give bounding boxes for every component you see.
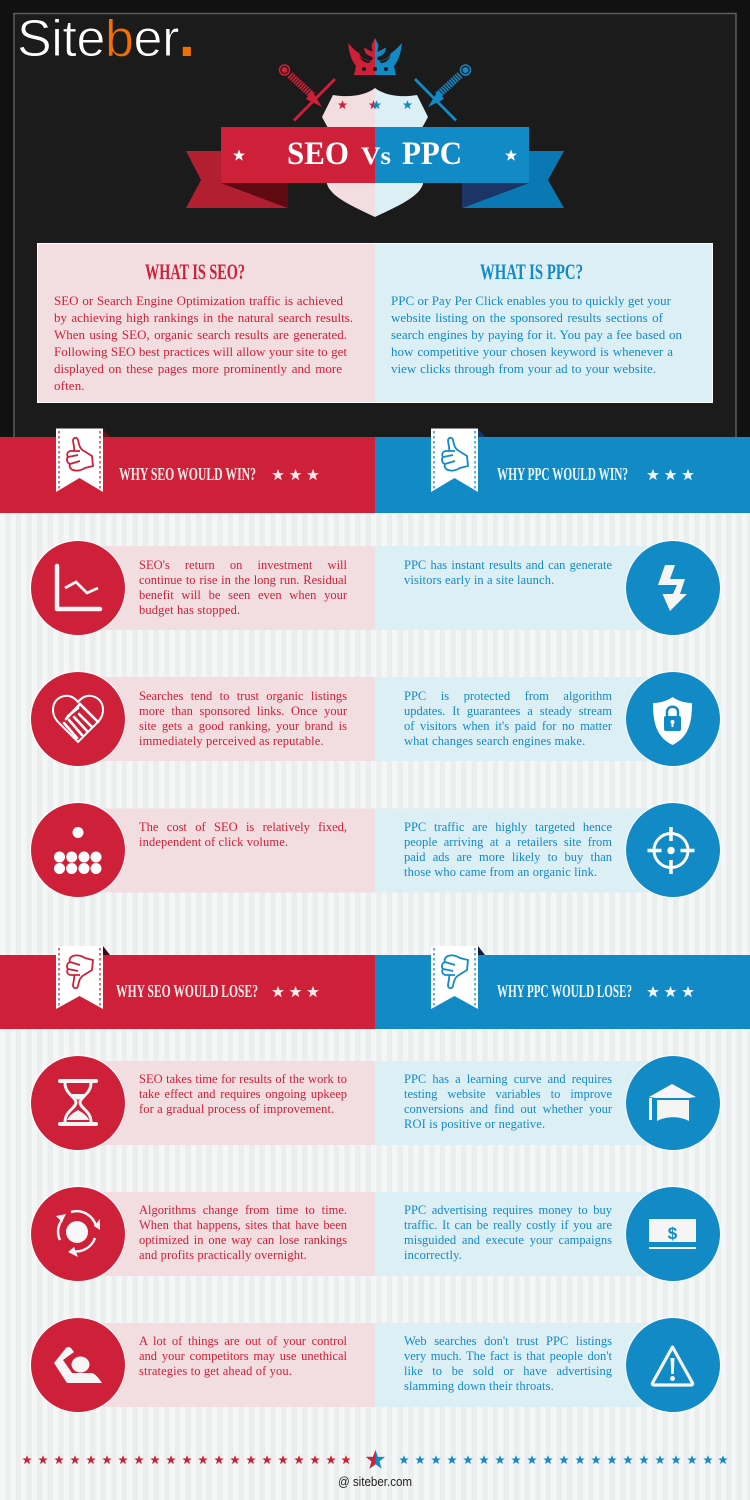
text: SEO lose 2: Algorithms change from time to time. (139, 1203, 347, 1217)
icon: money note (626, 1186, 720, 1282)
heading text: WHY PPC WOULD LOSE? (497, 981, 632, 1001)
text: PPC lose 3: slamming down their throats. (404, 1379, 554, 1393)
text: what is PPC: view clicks through from your ad to your website. (391, 361, 656, 376)
text: what is SEO: by achieving high rankings in the natural search results. (54, 310, 353, 325)
text: PPC win 2 (404, 689, 612, 748)
title: Vs (361, 143, 391, 170)
text: PPC win 2: PPC is protected from algorithm (404, 689, 612, 703)
icon: red sword (280, 65, 335, 120)
text: PPC lose 3 (404, 1334, 612, 1393)
text: SEO lose 3: and your competitors may use unethical (139, 1349, 347, 1363)
text: what is PPC: PPC or Pay Per Click enables you to quickly get your (391, 293, 671, 308)
title (287, 136, 462, 172)
text: SEO lose 1: for a gradual process of improvement. (139, 1102, 334, 1116)
text: PPC lose 3: like to be sold or have advertising (404, 1364, 612, 1378)
text: what is SEO: When using SEO, organic search results are generated. (54, 327, 347, 342)
text: SEO win 2: site gets a good ranking, your brand is (139, 719, 347, 733)
text: SEO win 1: benefit will be seen even when your (139, 588, 347, 602)
dark header background (0, 0, 750, 454)
panel: what is SEO (38, 244, 375, 402)
text: SEO win 2 (139, 689, 347, 748)
banner (186, 127, 564, 208)
text: SEO win 2: Searches tend to trust organic listings (139, 689, 347, 703)
text: PPC win 3: paid ads are more likely to buy than (404, 850, 612, 864)
header bar: why SEO would win (0, 428, 375, 513)
text: what is PPC: how competitive your chosen keyword is whenever a (391, 344, 673, 359)
icon: crosshair (626, 802, 720, 898)
panel: what is PPC (375, 244, 712, 402)
header bar: why PPC would lose (375, 946, 750, 1029)
text: SEO win 1: SEO's return on investment will (139, 558, 347, 572)
text: SEO lose 1: take effect and requires ongoing upkeep (139, 1087, 347, 1101)
icon: crown (348, 38, 402, 75)
icon: lightning bolt (626, 540, 720, 636)
text: what is PPC (391, 293, 682, 376)
heading: what is SEO: WHAT IS SEO? (145, 259, 245, 284)
text: what is PPC: search engines by paying for it. You pay a fee based on (391, 327, 682, 342)
text: PPC lose 2: traffic. It can be really costly if you are (404, 1218, 612, 1232)
text: SEO win 3 (139, 820, 347, 849)
text: SEO lose 3: A lot of things are out of your control (139, 1334, 347, 1348)
text: what is SEO: Following SEO best practices will allow your site to get (54, 344, 347, 359)
text: PPC lose 2 (404, 1203, 612, 1262)
text: SEO win 3: The cost of SEO is relatively fixed, (139, 820, 347, 834)
text: SEO lose 2 (139, 1203, 347, 1262)
text: PPC lose 1: testing website variables to improve (404, 1087, 612, 1101)
text: PPC win 1: visitors early in a site launch. (404, 573, 554, 587)
text: PPC lose 1: PPC has a learning curve and requires (404, 1072, 612, 1086)
icon: rotating circle (30, 1186, 126, 1282)
text: PPC lose 2: misguided and execute your campaigns (404, 1233, 612, 1247)
text: SEO lose 1: SEO takes time for results of the work to (139, 1072, 347, 1086)
text: SEO lose 2: optimized in one way can lose rankings (139, 1233, 347, 1247)
text: what is SEO (54, 293, 353, 393)
footer centre star (366, 1450, 385, 1469)
text: SEO lose 1 (139, 1072, 347, 1116)
heading text: WHY SEO WOULD WIN? (119, 464, 256, 484)
text: what is PPC: website listing on the sponsored results sections of (391, 310, 663, 325)
text: PPC lose 3: Web searches don't trust PPC listings (404, 1334, 612, 1348)
footer red stars (22, 1455, 351, 1464)
ribbon with thumbs up (56, 428, 103, 492)
icon: graduation cap (626, 1056, 720, 1150)
text: SEO lose 2: When that happens, sites that have been (139, 1218, 347, 1232)
text: PPC lose 1: conversions and find out whether your (404, 1102, 612, 1116)
stars (272, 469, 319, 480)
header bar: why PPC would win (375, 428, 750, 513)
heading: what is PPC: WHAT IS PPC? (480, 259, 583, 284)
text: SEO win 2: more than sponsored links. Once your (139, 704, 347, 718)
text: PPC lose 2: incorrectly. (404, 1248, 462, 1262)
icon: shield with lock (626, 672, 720, 766)
text: PPC win 3: people arriving at a retailers site from (404, 835, 612, 849)
text: SEO lose 3 (139, 1334, 347, 1378)
icon: warning triangle (626, 1318, 720, 1412)
text: what is SEO: often. (54, 378, 85, 393)
title: SEO (287, 136, 349, 172)
footer credit: @ siteber.com (338, 1474, 412, 1489)
text: PPC lose 3: very much. The fact is that people don't (404, 1349, 612, 1363)
text: PPC lose 1 (404, 1072, 612, 1131)
icon: money note: $ (668, 1224, 678, 1243)
text: what is SEO: SEO or Search Engine Optimization traffic is achieved (54, 293, 343, 308)
heading text: WHY PPC WOULD WIN? (497, 464, 628, 484)
text: SEO lose 3: strategies to get ahead of you. (139, 1364, 292, 1378)
header bar: why SEO would lose (0, 946, 375, 1029)
footer blue stars (399, 1455, 728, 1464)
text: PPC win 3: PPC traffic are highly targeted hence (404, 820, 612, 834)
text: SEO win 1: continue to rise in the long run. Residual (139, 573, 347, 587)
text: PPC win 2: updates. It guarantees a steady stream (404, 704, 612, 718)
panels: lose rows (100, 1061, 650, 1407)
text: SEO win 1: budget has stopped. (139, 603, 240, 617)
title: PPC (402, 136, 462, 172)
text: PPC win 1: PPC has instant results and can generate (404, 558, 612, 572)
icon: hourglass (30, 1056, 126, 1150)
stars (647, 986, 694, 997)
heading text: WHY SEO WOULD LOSE? (116, 981, 258, 1001)
text: PPC lose 2: PPC advertising requires money to buy (404, 1203, 612, 1217)
text: PPC win 2: what changes search engines make. (404, 734, 585, 748)
text: SEO win 3: independent of click volume. (139, 835, 288, 849)
text: PPC win 3 (404, 820, 612, 879)
stars (647, 469, 694, 480)
text: PPC lose 1: ROI is positive or negative. (404, 1117, 545, 1131)
text: SEO lose 2: and profits practically overnight. (139, 1248, 307, 1262)
icon: person lying (30, 1318, 126, 1412)
icon: dots (30, 802, 126, 898)
ribbon with thumbs down (56, 946, 103, 1009)
text: SEO win 1 (139, 558, 347, 617)
ribbon with thumbs down (431, 946, 478, 1009)
icon: shield (322, 88, 428, 217)
ribbon with thumbs up (431, 428, 478, 492)
text: what is SEO: displayed on these pages more prominently and more (54, 361, 342, 376)
stars (272, 986, 319, 997)
text: PPC win 1 (404, 558, 612, 587)
text: SEO win 2: immediately perceived as reputable. (139, 734, 324, 748)
icon: heart handshake (30, 672, 126, 766)
panels: win rows (100, 546, 650, 892)
text: PPC win 2: of visitors when it's paid for no matter (404, 719, 612, 733)
icon: line chart (30, 540, 126, 636)
text: PPC win 3: those who came from an organic link. (404, 865, 597, 879)
icon: blue sword (415, 65, 470, 120)
